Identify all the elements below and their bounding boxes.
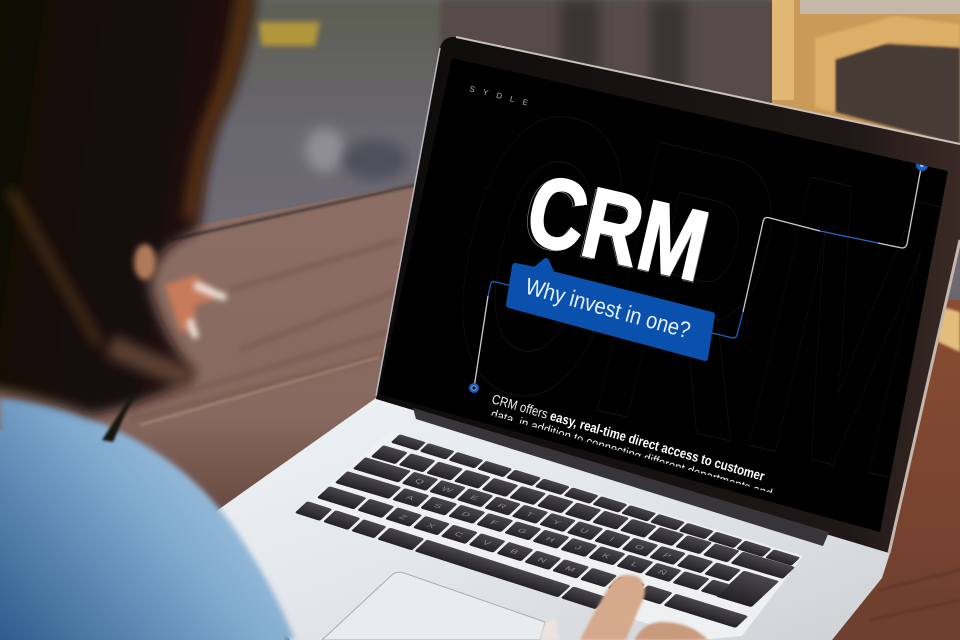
CRM title: CRM [517, 153, 718, 303]
body text: data, in addition to connecting different departments and [489, 406, 774, 501]
person's hand near ear [134, 244, 226, 338]
node: top right [916, 164, 928, 171]
lid edge highlight [456, 37, 960, 144]
laptop lid bezel [376, 37, 960, 553]
CRM title: CRM [513, 154, 719, 305]
connector line: right [712, 168, 921, 338]
body text: CRM offers easy, real-time direct access to customer [490, 391, 767, 484]
background: wooden furniture at top right [772, 0, 960, 150]
keyboard well [296, 431, 803, 640]
typing hand [540, 575, 708, 640]
keyboard [295, 434, 800, 628]
touchpad [322, 572, 545, 640]
connector line: left [474, 282, 512, 388]
background: wooden table [0, 183, 960, 640]
hinge [413, 408, 829, 546]
bubble text: Why invest in one? [523, 273, 693, 343]
speech bubble [509, 261, 712, 358]
SYDLE logo: SYDLE [469, 84, 529, 107]
CRM title [527, 178, 709, 283]
laptop base [215, 398, 890, 640]
laptop [215, 19, 960, 640]
person's hair [0, 0, 262, 415]
dark object by the hand [102, 388, 140, 442]
person's shirt [0, 398, 295, 640]
node: left [469, 383, 479, 393]
screen [379, 58, 948, 532]
